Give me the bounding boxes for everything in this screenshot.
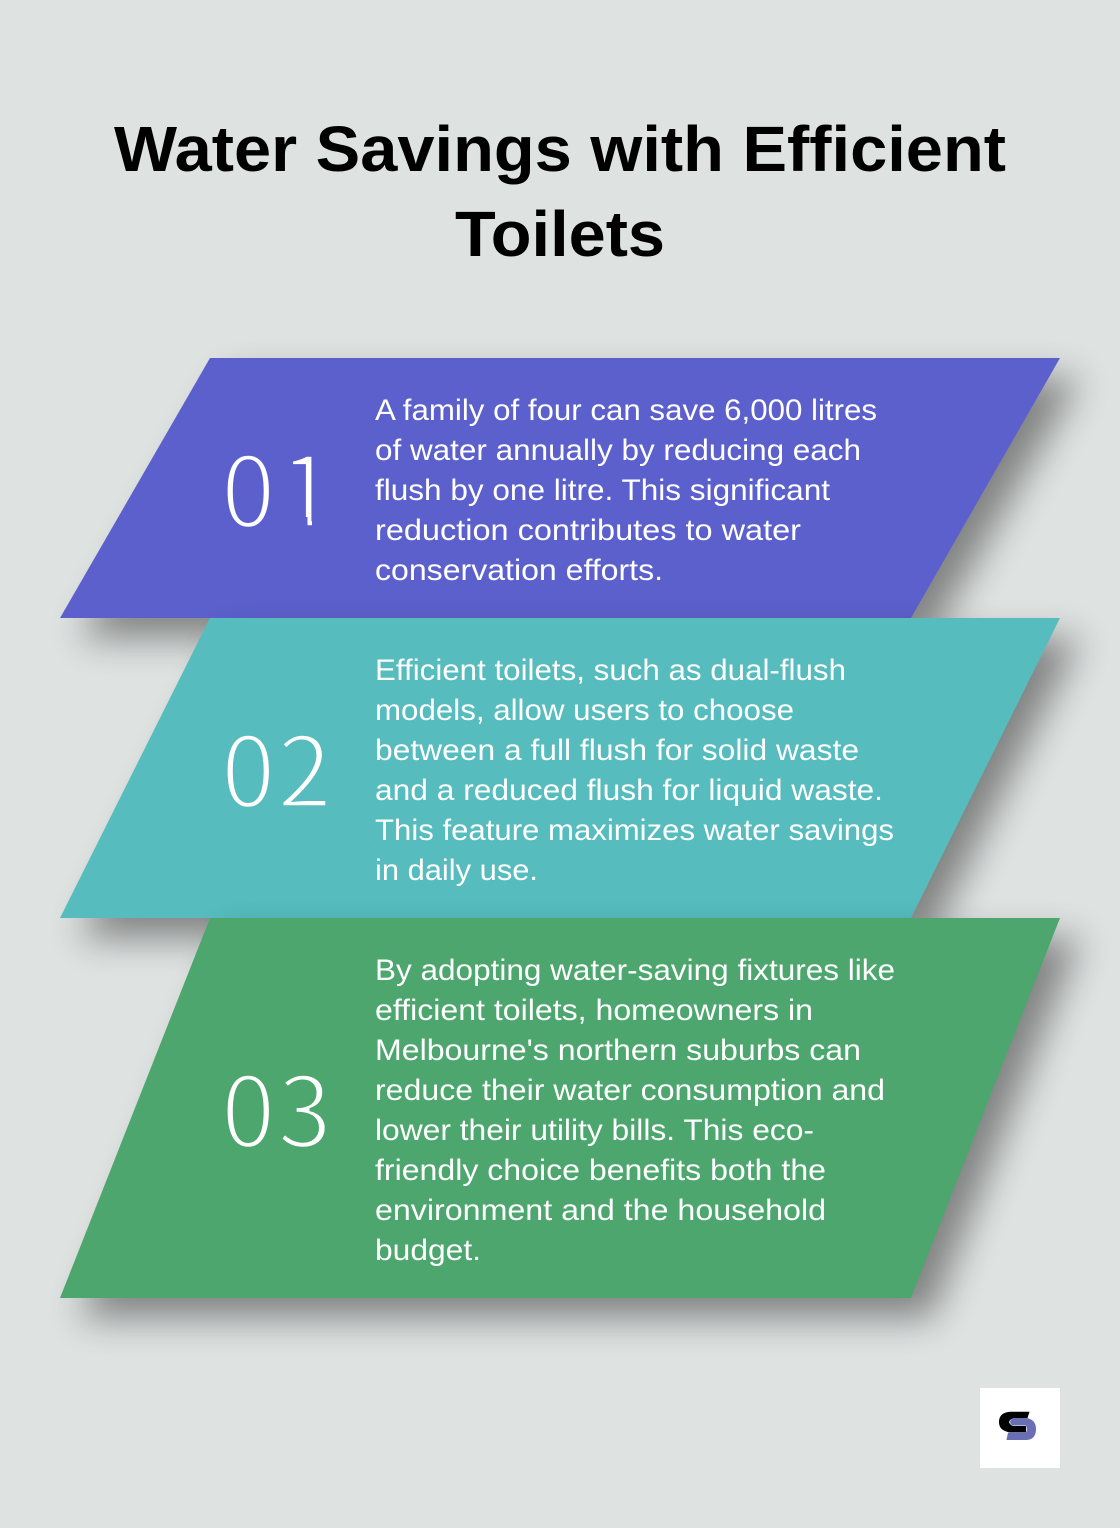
- logo: [980, 1388, 1060, 1468]
- text: step 01 description: [375, 394, 877, 587]
- text: step 02 description: models, allow users to choose: [375, 694, 794, 727]
- text: step 03 description: environment and the household: [375, 1194, 826, 1227]
- title: Toilets: [455, 198, 665, 270]
- logo background: [980, 1388, 1060, 1468]
- text: step 03 description: efficient toilets, homeowners in: [375, 994, 813, 1027]
- text: step 01 description: of water annually by reducing each: [375, 434, 861, 467]
- number 02: 02: [221, 694, 332, 836]
- logo mark: black upper part: [999, 1412, 1030, 1432]
- title: [114, 113, 1006, 270]
- text: step 01 description: conservation efforts.: [375, 554, 663, 587]
- text: step 03 description: friendly choice benefits both the: [375, 1154, 826, 1187]
- number 03: 03: [221, 1034, 332, 1176]
- text: step 02 description: and a reduced flush for liquid waste.: [375, 774, 883, 807]
- text: step 02 description: This feature maximizes water savings: [375, 814, 894, 847]
- banner: teal parallelogram: [60, 618, 1060, 918]
- text: step 03 description: budget.: [375, 1234, 481, 1267]
- text: step 03 description: Melbourne's northern suburbs can: [375, 1034, 861, 1067]
- text: step 01 description: flush by one litre. This significant: [375, 474, 831, 507]
- number 01: 01: [221, 414, 334, 556]
- text: step 03 description: By adopting water-saving fixtures like: [375, 954, 895, 987]
- text: step 03 description: reduce their water consumption and: [375, 1074, 885, 1107]
- banner: purple parallelogram: [60, 358, 1060, 618]
- title: Water Savings with Efficient: [114, 113, 1006, 185]
- logo mark: blue lower part: [1006, 1418, 1036, 1440]
- text: step 01 description: reduction contributes to water: [375, 514, 801, 547]
- text: step 02 description: between a full flush for solid waste: [375, 734, 859, 767]
- text: step 03 description: [375, 954, 895, 1267]
- banner: green parallelogram: [60, 918, 1060, 1298]
- text: step 02 description: in daily use.: [375, 854, 538, 887]
- text: step 01 description: A family of four can save 6,000 litres: [375, 394, 877, 427]
- text: step 02 description: [375, 654, 894, 887]
- panel: step 02: [60, 618, 1060, 918]
- panel: step 03: [60, 918, 1060, 1298]
- panel: step 01: [60, 358, 1060, 618]
- text: step 02 description: Efficient toilets, such as dual-flush: [375, 654, 846, 687]
- text: step 03 description: lower their utility bills. This eco-: [375, 1114, 814, 1147]
